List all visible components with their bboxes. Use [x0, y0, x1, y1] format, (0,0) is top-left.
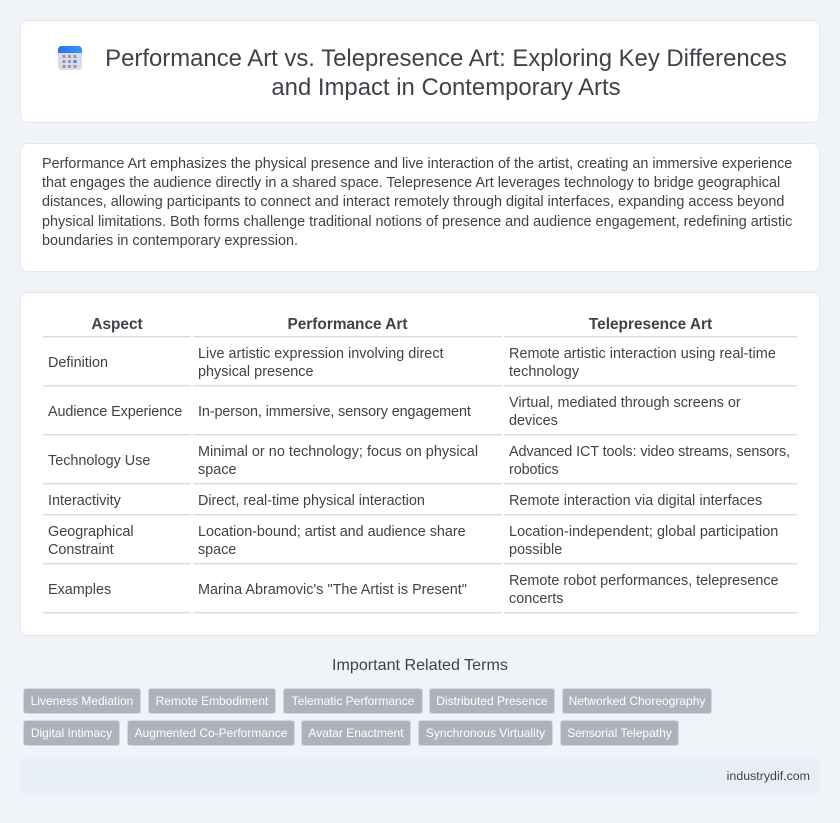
- table: Remote artistic interaction using real-time: [509, 346, 776, 362]
- intro text: physical limitations. Both forms challenge traditional notions of presence and audience engagement, redefining artistic: [42, 214, 792, 230]
- table: physical presence: [198, 364, 314, 380]
- related term chips: Sensorial Telepathy: [567, 726, 672, 740]
- related term chips: Synchronous Virtuality: [426, 726, 545, 740]
- table: Location-bound; artist and audience share: [198, 524, 466, 540]
- related term chips: Digital Intimacy: [31, 726, 112, 740]
- table: In-person, immersive, sensory engagement: [198, 404, 471, 420]
- table: Interactivity: [48, 493, 121, 509]
- table: possible: [509, 542, 562, 558]
- table: Live artistic expression involving direct: [198, 346, 444, 362]
- footer: [20, 759, 820, 793]
- related term chips: Distributed Presence: [436, 694, 548, 708]
- heading: related terms: Important Related Terms: [332, 656, 508, 674]
- title: Performance Art vs. Telepresence Art: Exploring Key Differences: [105, 45, 787, 72]
- panel: header: [20, 20, 820, 123]
- intro text: [42, 156, 792, 249]
- table: Virtual, mediated through screens or: [509, 395, 741, 411]
- related term chips: Telematic Performance: [292, 694, 414, 708]
- intro text: that engages the audience directly in a shared space. Telepresence Art leverages technology to bridge geographical: [42, 175, 780, 191]
- table: Telepresence Art: [589, 316, 712, 333]
- intro text: boundaries in contemporary expression.: [42, 233, 298, 249]
- related term chips: Augmented Co-Performance: [135, 726, 287, 740]
- table: Definition: [48, 355, 108, 371]
- related term chips: Remote Embodiment: [156, 694, 268, 708]
- intro text: distances, allowing participants to connect and interact remotely through digital interfaces, expanding access beyond: [42, 194, 784, 210]
- table: robotics: [509, 462, 559, 478]
- icon: calendar: [58, 46, 82, 70]
- table: Constraint: [48, 542, 114, 558]
- footer: industrydif.com: [727, 769, 810, 783]
- table: Minimal or no technology; focus on physical: [198, 444, 478, 460]
- table: Performance Art: [287, 316, 408, 333]
- table: Examples: [48, 582, 111, 598]
- table: devices: [509, 413, 558, 429]
- table: Direct, real-time physical interaction: [198, 493, 425, 509]
- related term chips: [23, 688, 712, 746]
- title: [105, 45, 787, 101]
- table: Technology Use: [48, 453, 150, 469]
- related term chips: Liveness Mediation: [31, 694, 133, 708]
- title: and Impact in Contemporary Arts: [271, 74, 621, 101]
- table: Remote robot performances, telepresence: [509, 573, 779, 589]
- table: Geographical: [48, 524, 134, 540]
- table: Audience Experience: [48, 404, 182, 420]
- panel: intro: [20, 143, 820, 272]
- table: Remote interaction via digital interfaces: [509, 493, 762, 509]
- panel: comparison table: [20, 292, 820, 636]
- table: technology: [509, 364, 579, 380]
- related term chips: Avatar Enactment: [308, 726, 404, 740]
- table: Advanced ICT tools: video streams, sensors,: [509, 444, 790, 460]
- table: [43, 316, 797, 614]
- table: space: [198, 542, 236, 558]
- related term chips: Networked Choreography: [569, 694, 705, 708]
- table: concerts: [509, 591, 563, 607]
- table: Location-independent; global participation: [509, 524, 778, 540]
- intro text: Performance Art emphasizes the physical presence and live interaction of the artist, creating an immersive experience: [42, 156, 792, 172]
- table: Aspect: [91, 316, 143, 333]
- table: space: [198, 462, 237, 478]
- table: Marina Abramovic's "The Artist is Present": [198, 582, 467, 598]
